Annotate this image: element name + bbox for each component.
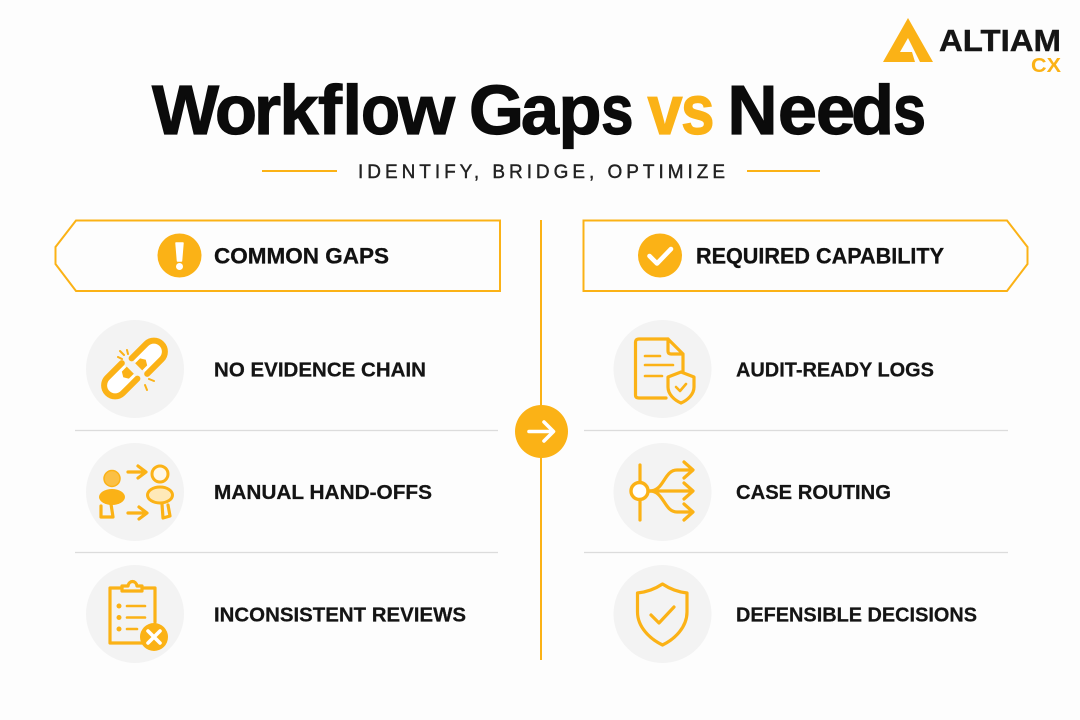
icon: broken chain (86, 320, 184, 418)
icon: logo triangle (883, 18, 933, 62)
icon: arrow badge (515, 405, 568, 458)
row: case routing: CASE ROUTING (736, 482, 891, 504)
logo wordmark: ALTIAM (939, 23, 1061, 58)
panel: required capability (584, 220, 1028, 663)
title: r (254, 71, 281, 149)
header: required capability (584, 220, 1028, 291)
icon: routing arrows (614, 443, 712, 541)
title: e (778, 71, 817, 149)
row: defensible decisions: DEFENSIBLE DECISIONS (736, 604, 977, 626)
title: s (893, 71, 926, 149)
title: p (558, 71, 602, 149)
title: W (152, 71, 219, 149)
panel: common gaps (56, 220, 500, 663)
logo: Altiam CX (883, 18, 1062, 77)
title: o (215, 71, 257, 149)
title: G (469, 71, 524, 149)
icon: check badge (638, 234, 682, 278)
icon: document with shield (614, 320, 712, 418)
title: l (342, 71, 362, 149)
center divider with arrow (515, 220, 568, 660)
icon: clipboard with x (86, 565, 184, 663)
title: e (816, 71, 855, 149)
row: manual hand-offs (86, 443, 432, 541)
title: a (521, 71, 560, 149)
header: common gaps (56, 220, 500, 291)
header: required capability: REQUIRED CAPABILITY (696, 244, 944, 268)
title (152, 71, 926, 149)
row: no evidence chain (86, 320, 426, 418)
title: s (601, 71, 634, 149)
title: d (851, 71, 894, 149)
row: audit-ready logs: AUDIT-READY LOGS (736, 360, 934, 382)
row: inconsistent reviews (86, 565, 466, 663)
row: inconsistent reviews: INCONSISTENT REVIEWS (214, 604, 466, 626)
title: o (361, 71, 400, 149)
header: common gaps: COMMON GAPS (214, 244, 389, 268)
title: w (397, 71, 456, 149)
row: case routing (614, 443, 891, 541)
icon: shield with check (614, 565, 712, 663)
subtitle: IDENTIFY, BRIDGE, OPTIMIZE (358, 162, 725, 183)
row: audit-ready logs (614, 320, 934, 418)
icon: hand-off people (86, 443, 184, 541)
title: k (280, 71, 319, 149)
title: v (648, 71, 683, 149)
title: N (728, 71, 778, 149)
title: s (681, 71, 714, 149)
logo sub-mark: CX (1031, 55, 1062, 77)
title: f (318, 71, 343, 149)
row: manual hand-offs: MANUAL HAND-OFFS (214, 482, 432, 504)
row: defensible decisions (614, 565, 977, 663)
icon: exclamation (158, 234, 202, 278)
row: no evidence chain: NO EVIDENCE CHAIN (214, 360, 426, 382)
